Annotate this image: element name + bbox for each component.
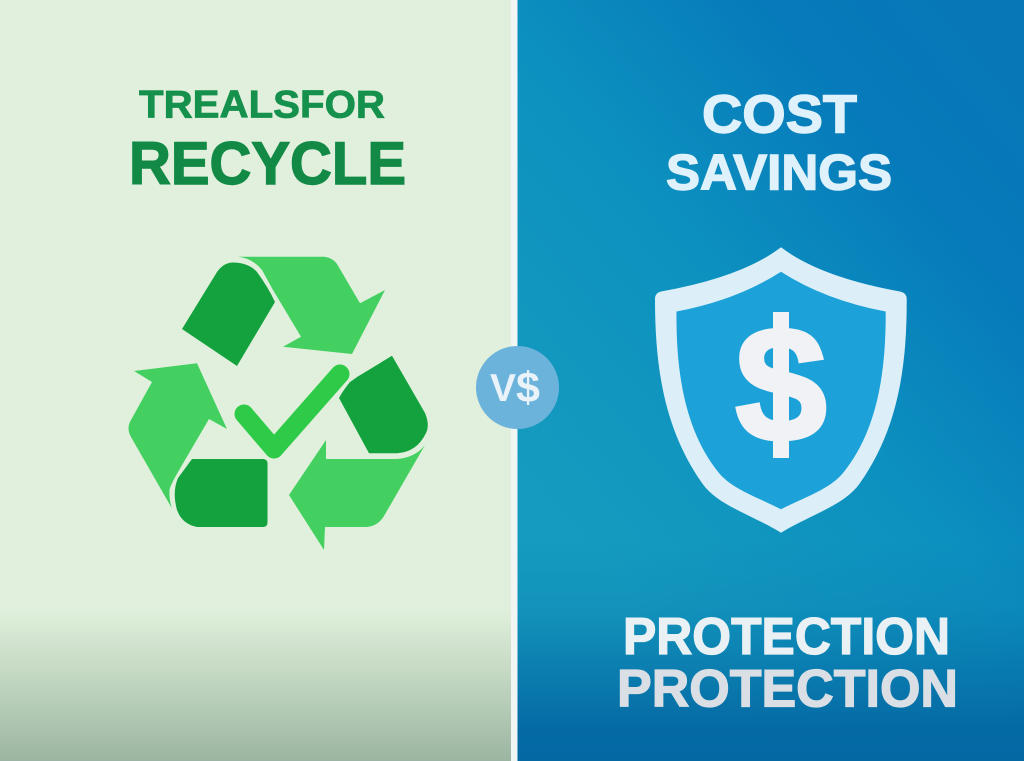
divider <box>511 0 518 761</box>
heading: recycle: TREALSFOR <box>139 84 385 126</box>
badge: vs: V <box>490 367 516 410</box>
icon: shield with dollar <box>655 247 907 533</box>
text: protection lines: PROTECTION <box>623 608 950 666</box>
panel: cost savings background <box>517 0 1024 761</box>
icon: check mark <box>244 374 340 449</box>
text: protection lines: PROTECTION <box>617 660 958 718</box>
heading: cost savings: SAVINGS <box>666 144 892 200</box>
heading: cost savings <box>666 84 892 200</box>
icon: recycling symbol with check <box>128 257 428 550</box>
badge: vs <box>476 346 559 429</box>
text: protection lines <box>617 608 958 718</box>
heading: cost savings: COST <box>702 84 857 144</box>
dollar sign: $ <box>735 293 827 476</box>
panel: recycle background <box>0 0 512 761</box>
heading: recycle: RECYCLE <box>129 130 406 197</box>
badge: vs: $ <box>516 364 540 412</box>
heading: recycle <box>129 84 406 197</box>
